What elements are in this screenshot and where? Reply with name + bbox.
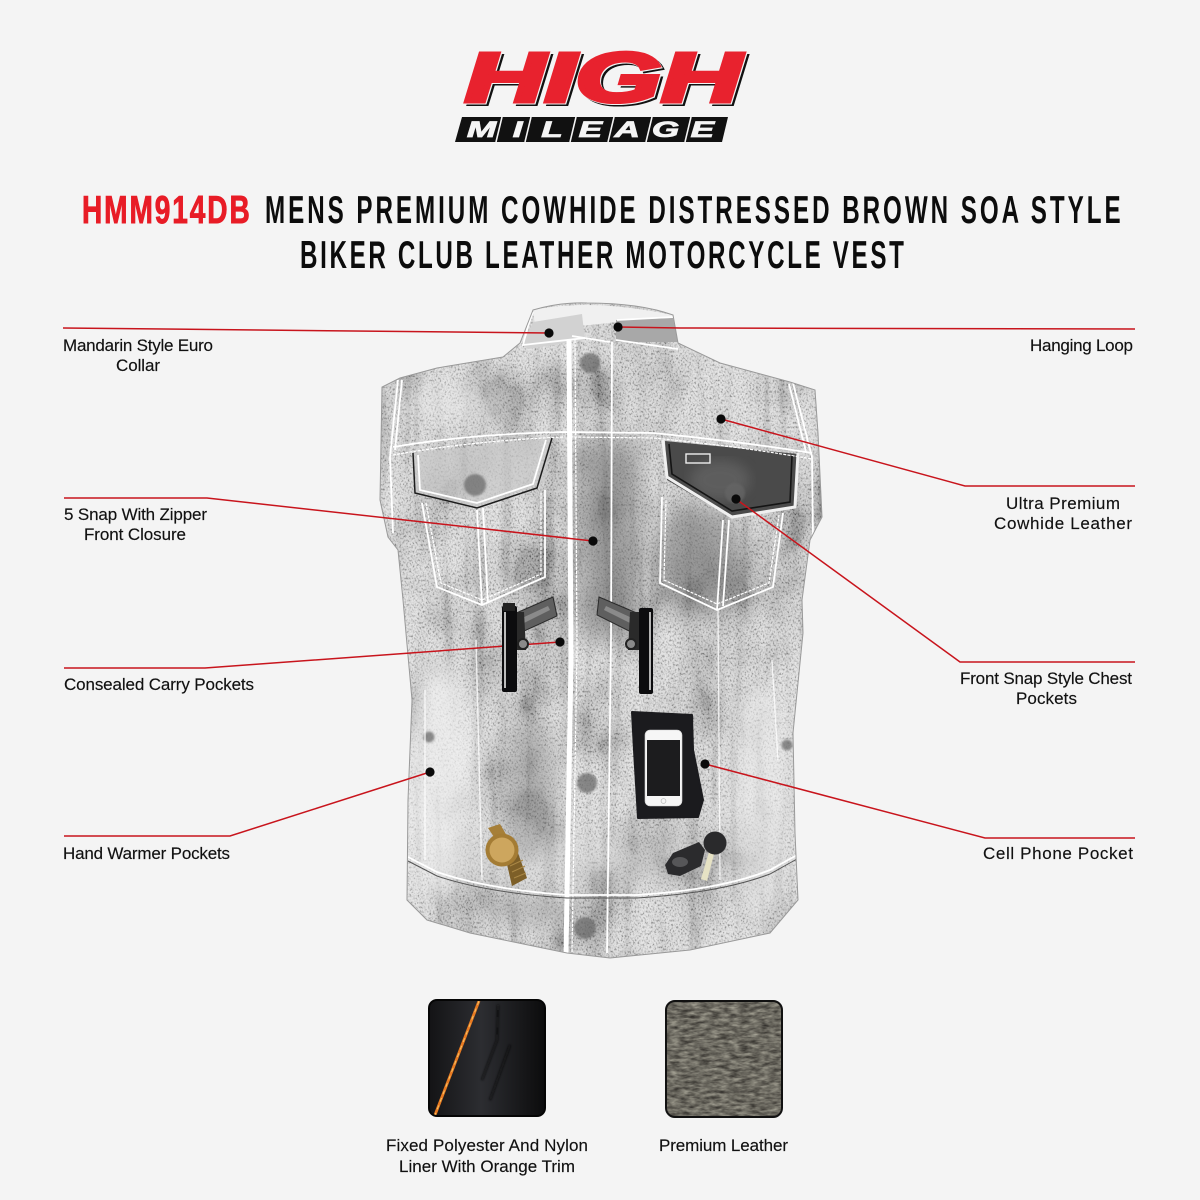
right chest pocket flap — [665, 441, 798, 518]
title — [82, 188, 1121, 276]
callout: Cell Phone Pocket — [700, 759, 1135, 863]
logo: High Mileage: HIGH — [466, 40, 744, 118]
callout: Ultra Premium Cowhide Leather: Cowhide Leather — [994, 514, 1132, 533]
callout: Front Snap Style Chest Pockets — [731, 494, 1135, 708]
logo: High Mileage: MILEAGE — [467, 118, 716, 142]
caption: liner: Liner With Orange Trim — [399, 1157, 575, 1176]
callout: Consealed Carry Pockets: Consealed Carry Pockets — [64, 675, 254, 694]
waistband — [408, 855, 797, 895]
yoke seam — [393, 432, 812, 453]
caption: premium leather: Premium Leather — [659, 1136, 788, 1155]
callout: Consealed Carry Pockets — [64, 637, 565, 694]
title: HMM914DB — [82, 189, 250, 232]
callout: Hand Warmer Pockets: Hand Warmer Pockets — [63, 844, 230, 863]
placket and center seams — [566, 340, 571, 953]
title: MENS PREMIUM COWHIDE DISTRESSED BROWN SOA STYLE — [265, 188, 1121, 231]
callout: Ultra Premium Cowhide Leather — [716, 414, 1135, 533]
icon: car keys — [665, 832, 726, 881]
callout: Cell Phone Pocket: Cell Phone Pocket — [983, 844, 1133, 863]
icon: right pistol — [597, 597, 653, 694]
caption: liner: Fixed Polyester And Nylon — [386, 1136, 588, 1155]
icon: phone in black pouch — [632, 712, 703, 818]
logo: High Mileage: HIGH — [468, 41, 746, 119]
icon: gold watch — [486, 824, 527, 886]
callout: 5 Snap With Zipper Front Closure: 5 Snap With Zipper — [64, 505, 207, 524]
armholes — [390, 380, 398, 533]
callout: Hand Warmer Pockets — [63, 767, 435, 863]
side seams and pocket openings — [425, 640, 482, 880]
right pocket — [663, 440, 798, 517]
callout: Mandarin Style Euro Collar: Mandarin Style Euro — [63, 336, 213, 355]
callout: Ultra Premium Cowhide Leather: Ultra Premium — [1006, 494, 1120, 513]
logo: High Mileage — [455, 38, 746, 142]
callout: 5 Snap With Zipper Front Closure — [64, 498, 598, 546]
collar — [533, 305, 676, 326]
callout: Front Snap Style Chest Pockets: Pockets — [1016, 689, 1077, 708]
callout: 5 Snap With Zipper Front Closure: Front Closure — [84, 525, 186, 544]
left pocket — [413, 438, 552, 508]
callout: Hanging Loop: Hanging Loop — [1030, 336, 1133, 355]
callout: Hanging Loop — [613, 322, 1135, 355]
dark and light shading — [400, 385, 790, 926]
collar seams — [523, 312, 585, 345]
icon: left pistol — [502, 597, 557, 692]
logo: High Mileage: HIGH — [465, 38, 743, 116]
vest illustration — [370, 295, 830, 965]
callout: Mandarin Style Euro Collar: Collar — [116, 356, 160, 375]
callout: Front Snap Style Chest Pockets: Front Snap Style Chest — [960, 669, 1132, 688]
swatch: premium leather — [666, 1001, 782, 1117]
left chest pocket flap — [414, 438, 552, 508]
caption: liner — [386, 1136, 588, 1176]
snaps — [424, 353, 792, 939]
callout: Mandarin Style Euro Collar — [63, 328, 554, 375]
swatch: polyester and nylon liner — [428, 999, 546, 1117]
title: BIKER CLUB LEATHER MOTORCYCLE VEST — [300, 233, 904, 276]
